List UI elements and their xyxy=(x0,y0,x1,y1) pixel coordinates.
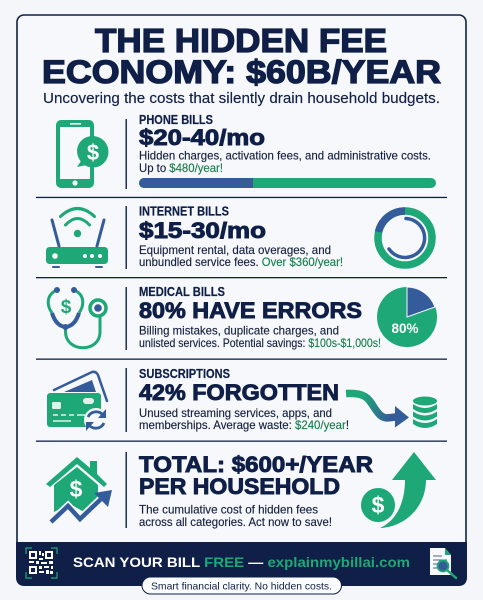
label: SUBSCRIPTIONS xyxy=(139,367,230,381)
icon: coin stack xyxy=(413,396,437,428)
icon: phone with dollar bubble: $ xyxy=(87,140,99,165)
icon: stethoscope xyxy=(48,287,106,348)
icon: house with rising arrow xyxy=(46,457,112,522)
tagline pill: Smart financial clarity. No hidden costs. xyxy=(151,580,332,592)
panel: subscriptions xyxy=(47,367,437,432)
title: ECONOMY: $60B/YEAR xyxy=(42,54,441,90)
description: The cumulative cost of hidden fees xyxy=(139,502,318,516)
label: INTERNET BILLS xyxy=(139,204,229,218)
panel: internet bills xyxy=(46,204,432,269)
description: Hidden charges, activation fees, and administrative costs. xyxy=(139,148,431,162)
figure: $20-40/mo xyxy=(139,125,265,150)
description: memberships. Average waste: $240/year! xyxy=(139,418,349,432)
icon: phone with dollar bubble xyxy=(56,120,108,188)
pie chart: 80% xyxy=(391,321,419,336)
icon: QR code xyxy=(26,548,57,578)
icon: stethoscope: $ xyxy=(61,297,72,318)
panel: medical bills xyxy=(48,285,437,350)
label: MEDICAL BILLS xyxy=(139,285,225,299)
icon: dollar coin with big arrow: $ xyxy=(372,492,385,518)
description: across all categories. Act now to save! xyxy=(139,515,332,529)
figure: PER HOUSEHOLD xyxy=(139,474,340,499)
description: Billing mistakes, duplicate charges, and xyxy=(139,324,339,338)
description: unlisted services. Potential savings: $100s-$1,000s! xyxy=(139,336,381,350)
panel: phone bills xyxy=(56,113,436,189)
figure: TOTAL: $600+/YEAR xyxy=(139,452,373,477)
figure xyxy=(139,452,373,499)
arrow to coin stack xyxy=(346,393,409,428)
figure: 80% HAVE ERRORS xyxy=(139,298,362,323)
description: Unused streaming services, apps, and xyxy=(139,406,332,420)
label: PHONE BILLS xyxy=(139,113,213,127)
tagline pill xyxy=(142,577,342,594)
panel: total xyxy=(46,452,436,529)
icon: wifi router xyxy=(46,208,108,268)
description: unbundled service fees. Over $360/year! xyxy=(139,255,343,269)
description: Equipment rental, data overages, and xyxy=(139,243,331,257)
title xyxy=(42,22,441,90)
call to action: SCAN YOUR BILL FREE — explainmybillai.com xyxy=(73,554,410,570)
progress bar xyxy=(139,178,436,188)
highlight: Up to $480/year! xyxy=(139,161,223,175)
icon: document with magnifier xyxy=(430,548,456,578)
subtitle: Uncovering the costs that silently drain household budgets. xyxy=(43,90,440,107)
title: THE HIDDEN FEE xyxy=(95,22,387,59)
figure: 42% FORGOTTEN xyxy=(139,380,339,405)
figure: $15-30/mo xyxy=(139,218,266,243)
description xyxy=(139,406,349,432)
icon: credit cards with renew arrows xyxy=(47,372,108,432)
icon: house with rising arrow: $ xyxy=(70,476,83,502)
description xyxy=(139,502,332,529)
donut chart xyxy=(378,211,432,265)
description xyxy=(139,243,343,269)
pie chart xyxy=(377,287,437,347)
icon: dollar coin with big arrow xyxy=(359,452,436,528)
footer banner xyxy=(16,542,467,586)
description xyxy=(139,324,381,350)
